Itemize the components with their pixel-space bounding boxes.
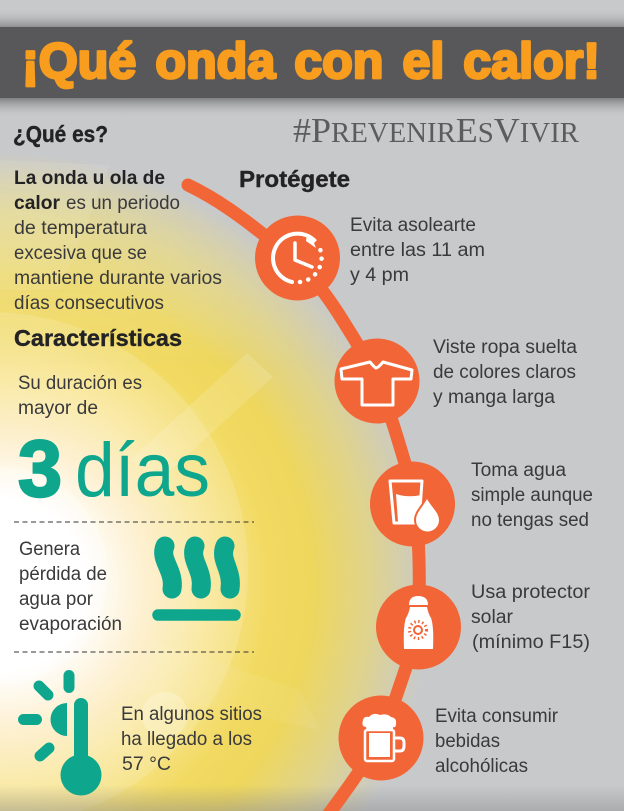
text: ropa: de colores claros	[433, 362, 576, 383]
text block: definition: días consecutivos	[14, 293, 164, 314]
text: evaporación	[19, 539, 122, 635]
text: duración: mayor de	[18, 398, 98, 419]
text: evaporación: Genera	[19, 539, 80, 560]
heading: características: Características	[14, 325, 182, 351]
icon: beer mug	[338, 696, 424, 780]
text: ropa: Viste ropa suelta	[433, 337, 577, 358]
sun glow	[0, 150, 434, 811]
text block: definition: La onda u ola de	[14, 168, 165, 189]
icon: water glass and drop	[370, 462, 455, 546]
text: agua: simple aunque	[471, 485, 593, 506]
text: alcohol: bebidas	[435, 731, 500, 752]
text: asolearte	[350, 215, 485, 286]
text: agua	[471, 460, 593, 531]
text: duración: Su duración es	[18, 373, 142, 394]
text: protector: (mínimo F15)	[472, 632, 590, 653]
text: agua: no tengas sed	[471, 510, 589, 531]
text: evaporación: pérdida de	[19, 564, 107, 585]
big stat: 3 días: 3	[18, 424, 62, 513]
text: evaporación: evaporación	[19, 614, 122, 635]
text block: definition: excesiva que se	[14, 243, 147, 264]
text block: definition: es un periodo	[66, 193, 180, 214]
text: temperatura: En algunos sitios	[121, 704, 262, 725]
title: ¡Qué onda con el calor!	[22, 33, 600, 89]
icon: sunscreen bottle	[376, 584, 461, 670]
text: temperatura: 57 °C	[122, 754, 171, 775]
footer shadow	[0, 785, 624, 811]
text: alcohol	[435, 706, 559, 777]
text: asolearte: entre las 11 am	[350, 240, 485, 261]
hashtag: #PREVENIRESVIVIR	[293, 111, 579, 150]
text: ropa: y manga larga	[433, 387, 555, 408]
text: asolearte: Evita asolearte	[350, 215, 476, 236]
text: asolearte: y 4 pm	[350, 265, 409, 286]
text: protector: Usa protector	[471, 582, 591, 603]
text: temperatura	[121, 704, 262, 775]
big stat: 3 días: días	[75, 428, 210, 513]
icon: thermometer and sun	[18, 670, 102, 796]
icon: clock	[255, 216, 340, 300]
text: duración	[18, 373, 142, 419]
text: agua: Toma agua	[471, 460, 566, 481]
heading: qué es: ¿Qué es?	[13, 121, 108, 147]
icon: shirt	[334, 338, 420, 424]
text: temperatura: ha llegado a los	[121, 729, 252, 750]
text: ropa	[433, 337, 577, 408]
text block: definition: calor	[14, 193, 61, 214]
text block: definition: mantiene durante varios	[14, 268, 222, 289]
text: protector	[471, 582, 591, 653]
text: protector: solar	[471, 607, 514, 628]
text block: definition	[14, 168, 222, 314]
text: alcohol: Evita consumir	[435, 706, 559, 727]
text block: definition: de temperatura	[14, 218, 147, 239]
text: alcohol: alcohólicas	[435, 756, 528, 777]
heading: protégete: Protégete	[239, 166, 350, 192]
text: evaporación: agua por	[19, 589, 94, 610]
big stat: 3 días	[18, 424, 210, 513]
orange path	[188, 185, 419, 811]
icon: steam	[158, 546, 235, 615]
title band	[0, 8, 624, 118]
